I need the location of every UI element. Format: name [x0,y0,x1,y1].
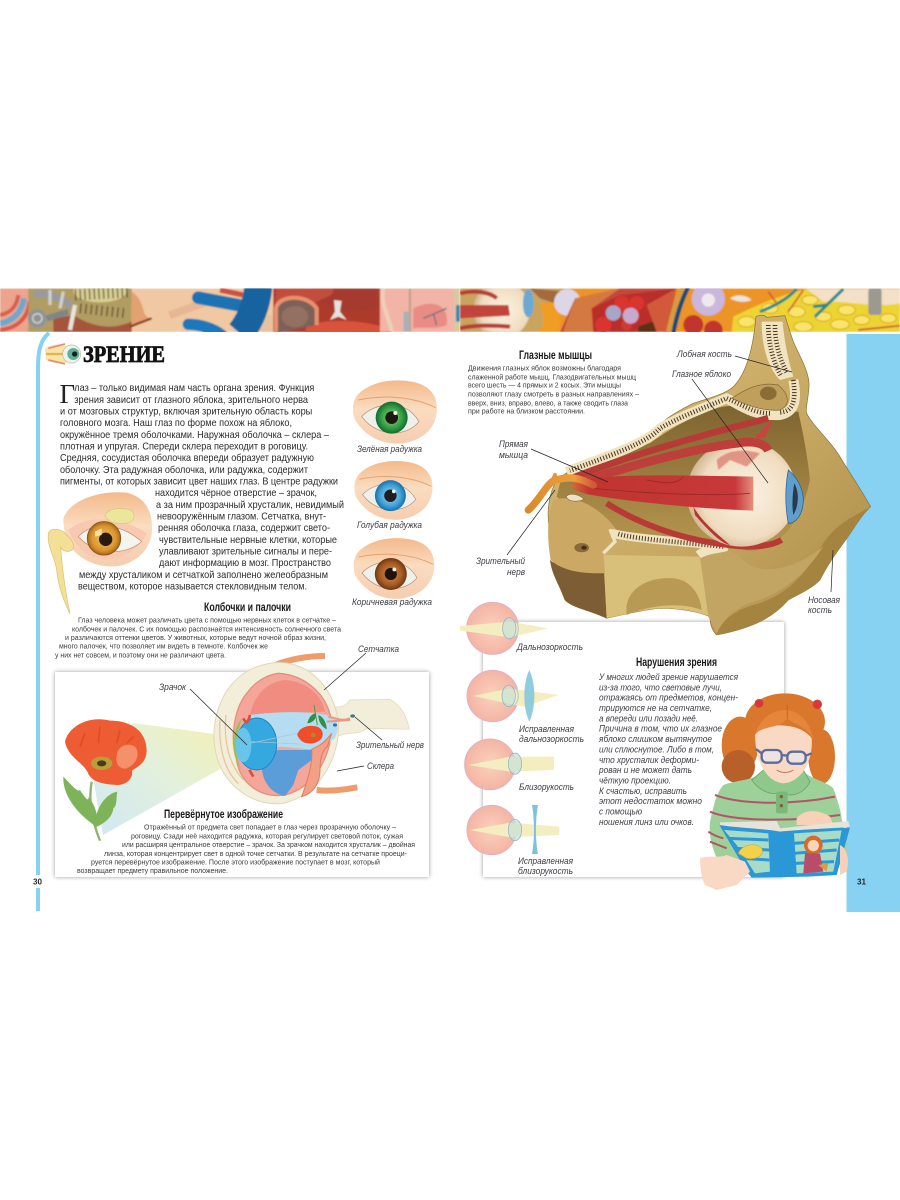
caption: Зелёная радужка [357,444,422,454]
text block: у них нет совсем, и поэтому они не различают цвета. [55,652,226,660]
main article text: плотная и упругая. Спереди склера переходит в роговицу. [60,442,308,452]
main article text: и от мозговых структур, включая зрительную область коры [60,406,312,418]
text block: линза, которая концентрирует свет в одной точке сетчатки. В результате на сетчатке проеци- [104,850,408,858]
label: nasal bone: кость [808,605,832,615]
vision disorders: eye captions: Дальнозоркость [516,642,583,652]
face [755,725,812,783]
heading: eye muscles: Глазные мышцы [519,350,592,362]
eye: corrected farsightedness [467,670,558,722]
label: rectus muscle: Прямая [499,439,528,449]
label: frontal bone: Лобная кость [676,349,732,359]
label: pupil: Зрачок [159,682,187,692]
text block: vision disorders [598,672,738,827]
text block: vision disorders: К счастью, исправить [599,786,687,796]
page number 30: 30 [33,876,42,886]
main article text: зрения зависит от глазного яблока, зрительного нерва [74,394,308,406]
eye cross-section [214,656,409,804]
main article text [60,379,344,592]
label: rectus muscle [499,439,608,482]
main article text: Г [60,379,75,409]
vision disorders: eye captions: дальнозоркость [519,734,584,744]
text block: vision disorders: с помощью [599,806,642,816]
text block: vision disorders: этот недостаток можно [599,796,702,806]
panel background [55,672,429,877]
icon: green eye [353,380,437,444]
poppy flower [63,719,147,841]
caption: Коричневая радужка [352,597,432,607]
main article text: ренняя оболочка глаза, содержит свето- [158,522,330,534]
mini mermaid [804,836,823,854]
vision disorders: eye diagrams [460,602,559,855]
label: frontal bone [676,349,792,372]
main article text: находится чёрное отверстие – зрачок, [155,488,317,499]
text block [77,824,415,875]
caption: Голубая радужка [357,520,422,530]
text block: колбочек и палочек. С их помощью распознаётся интенсивность солнечного света [72,626,341,634]
hand on book [797,811,833,825]
text block: возвращает предмету правильное положение. [77,868,228,875]
section: cones and rods [55,602,341,660]
header strip: right page anatomy collage [460,288,900,332]
main article text: лаз – только видимая нам часть органа зрения. Функция [74,383,314,394]
left page blue margin line [38,333,49,911]
text block: и различаются оттенки цветов. У животных, которые ведут ночной образ жизни, [65,634,326,642]
vision disorders: eye captions: Исправленная [518,856,573,866]
text block: Отражённый от предмета свет попадает в глаз через прозрачную оболочку – [144,824,396,832]
text block: eye muscles: Движения глазных яблок возможны благодаря [468,364,621,372]
sweater [710,772,847,865]
text block: vision disorders: рован и не может дать [598,765,692,775]
text block: vision disorders: а впереди или позади неё. [599,713,698,723]
book cover [719,825,850,878]
hair back [722,693,835,784]
text block: или расширяя центральное отверстие – зрачок. За зрачком находится хрусталик – двойная [122,841,415,849]
label: optic nerve: нерв [507,567,525,577]
text block: eye muscles: всего шесть — 4 прямых и 2 косых. Эти мышцы [468,383,621,390]
text block: eye muscles: позволяют глазу смотреть в разных направлениях – [468,392,639,398]
title with eye icon [45,342,165,367]
text block: eye muscles: слаженной работе мышц. Глазодвигательных мышц [468,374,636,382]
text block: eye muscles: вверх, вниз, вправо, влево, а также сводить глаза [468,400,628,407]
vision disorders: eye captions: Близорукость [519,782,574,792]
hair ties [755,699,763,708]
text block: vision disorders: трируются не на сетчатке, [599,703,712,713]
text block: vision disorders: отражаясь от предметов, концен- [599,693,738,703]
text block: Глаз человека может различать цвета с помощью нервных клеток в сетчатке – [78,618,336,624]
vision disorders: eye captions: близорукость [518,866,573,876]
main article text: окружённое тремя оболочками. Наружная оболочка – склера – [60,429,329,441]
book pages [720,821,850,832]
icon: blue eye [354,461,433,520]
main article text: улавливают зрительные сигналы и пере- [159,546,332,558]
main article text: дают информацию в мозг. Пространство [159,557,331,569]
text block: руется перевёрнутое изображение. После этого изображение поступает в мозг, который [91,858,380,866]
label: nasal bone: Носовая [808,595,840,605]
icon: brown eye [354,538,434,599]
text block: vision disorders: чёткую проекцию. [599,776,671,786]
skull cross-section with eye muscles [528,315,871,635]
glasses [756,749,812,764]
label: sclera: Склера [367,761,394,771]
text block: много палочек, что позволяет им видеть в темноте. Колбочек же [59,643,268,651]
main article text: веществом, которое называется стекловидным телом. [78,582,307,592]
main article text: между хрусталиком и сетчаткой заполнено желеобразным [79,569,328,581]
vision disorders: eye captions: Исправленная [519,724,574,734]
main article text: невооружённым глазом. Сетчатка, внут- [157,512,326,522]
label: retina: Сетчатка [358,644,399,654]
label: rectus muscle: мышца [499,450,528,460]
text block [55,618,341,660]
eye: nearsightedness [465,739,554,790]
heading: Колбочки и палочки [204,602,291,614]
label: eyeball: Глазное яблоко [672,369,731,379]
brown iris eye [352,538,434,607]
main article text: Средняя, сосудистая оболочка впереди образует радужную [60,452,314,464]
text block: vision disorders: из-за того, что световые лучи, [599,682,722,692]
label: optic nerve: Зрительный нерв [356,740,424,750]
header strip: left page anatomy collage [0,288,460,332]
label: nasal bone [808,550,840,615]
girl reading a book [700,693,850,890]
heading: Перевёрнутое изображение [164,809,283,821]
text block: vision disorders: что хрусталик деформи- [599,755,699,765]
hand with shell [700,855,750,890]
right page blue side panel [846,334,900,912]
vision disorders: eye captions [516,642,584,876]
main article text: оболочку. Эта радужная оболочка, или радужка, содержит [60,464,308,476]
text block: vision disorders: или сплюснутое. Либо в том, [599,744,714,754]
eye: corrected nearsightedness [467,805,559,855]
label: pupil [159,682,247,745]
label: sclera [337,761,394,771]
heading: vision disorders: Нарушения зрения [636,657,717,669]
eye: farsightedness [460,602,548,654]
text block: eye muscles: при работе на близком расстоянии. [468,408,585,416]
panel: inverted image [55,644,429,877]
text block: vision disorders: У многих людей зрение нарушается [598,672,738,682]
label: eyeball [672,369,768,483]
icon: eye with optic nerve [45,344,81,364]
main article text: чувствительные нервные клетки, которые [159,535,337,546]
panel: vision disorders background [483,622,784,877]
text block: vision disorders: Причина в том, что их глазное [599,724,722,734]
light beam from flower to eye [90,723,222,835]
green iris eye [353,380,437,454]
label: optic nerve [355,717,424,750]
blue iris eye [354,461,433,530]
text block: eye muscles [468,364,639,416]
label: optic nerve [476,490,555,577]
text block: vision disorders: ношения линз или очков. [599,817,694,827]
text block: vision disorders: яблоко слишком вытянутое [598,734,712,744]
main article text: а за ним прозрачный хрусталик, невидимый [156,500,344,511]
label: retina [324,644,399,690]
page number 31: 31 [857,876,866,886]
label: optic nerve: Зрительный [476,556,525,566]
text block: роговицу. Сзади неё находится радужка, которая регулирует световой поток, сужая [131,832,403,840]
main article text: головного мозга. Наш глаз по форме похож на яблоко, [60,417,292,429]
main article text: пигменты, от которых зависит цвет наших глаз. В центре радужки [60,476,338,488]
title text: ЗРЕНИЕ [83,342,165,367]
eye with tear gland [48,492,152,614]
